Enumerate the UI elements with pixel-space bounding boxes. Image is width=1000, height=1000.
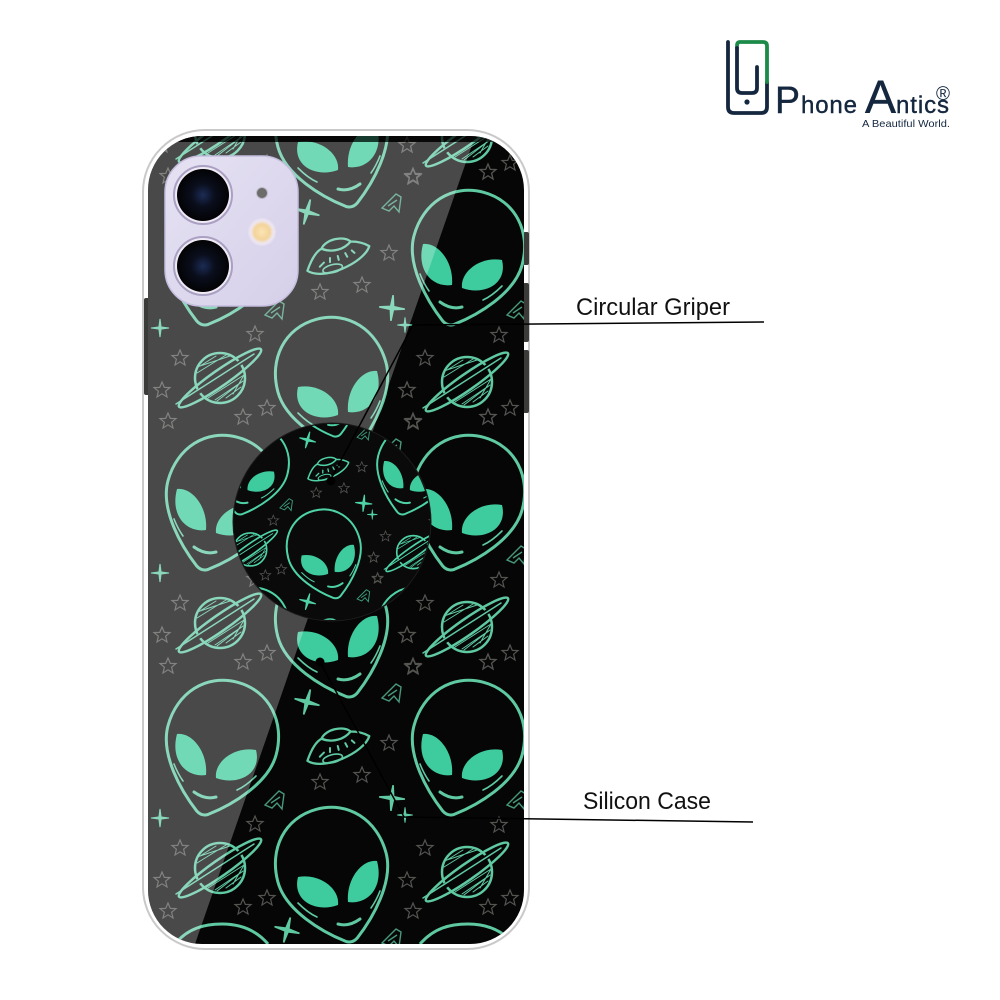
case white rim <box>143 130 529 949</box>
callout: Circular Griper <box>326 294 764 486</box>
phone case <box>142 129 530 950</box>
logo wordmark: ® <box>936 84 950 105</box>
camera module <box>165 156 298 306</box>
logo wordmark: A Beautiful World. <box>862 118 950 130</box>
logo wordmark <box>775 71 950 130</box>
logo: Phone Antics <box>728 42 950 130</box>
icon: flash <box>248 218 276 246</box>
icon: upper lens <box>174 166 232 224</box>
logo wordmark: A <box>865 71 896 123</box>
callout: Circular Griper: Circular Griper <box>576 294 730 321</box>
logo wordmark: hone <box>801 92 857 119</box>
callout: Silicon Case: Silicon Case <box>583 788 711 815</box>
icon: phone outline <box>728 42 767 113</box>
icon: microphone <box>256 188 268 198</box>
glossy reflection <box>148 142 473 944</box>
side buttons <box>144 232 529 413</box>
case back with alien pattern <box>148 136 524 944</box>
callout: Silicon Case <box>316 658 753 822</box>
logo wordmark: ntics <box>896 92 949 119</box>
bottom edge pattern pieces <box>178 917 504 944</box>
logo wordmark: P <box>775 80 800 122</box>
circular griper <box>232 422 432 622</box>
icon: lower lens <box>174 237 232 295</box>
